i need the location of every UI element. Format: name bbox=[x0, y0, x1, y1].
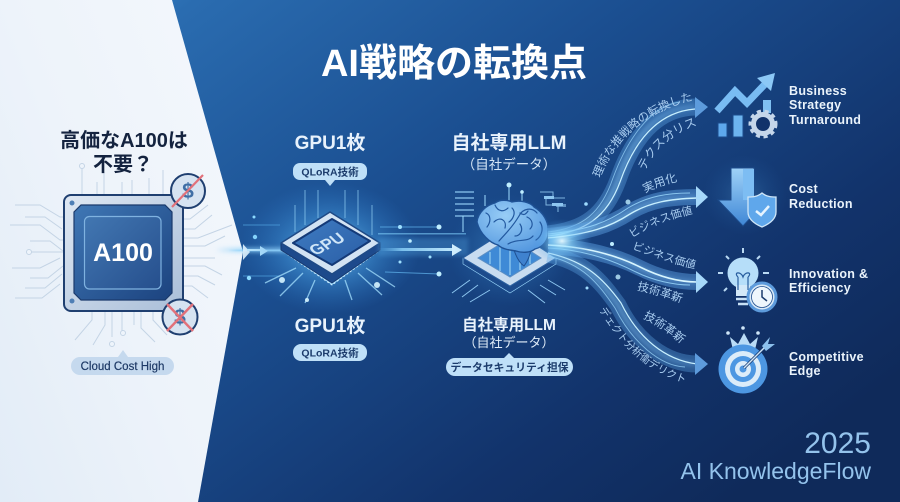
callout: Cloud Cost High: Cloud Cost High bbox=[81, 361, 164, 373]
icon: A100 chip: A100 bbox=[93, 239, 153, 267]
panel: outcome Innovation and Efficiency bbox=[718, 248, 868, 311]
arrow: data beams from GPU to LLM bbox=[378, 224, 468, 276]
arrow: flow to Innovation bbox=[548, 245, 708, 293]
icon: down arrow and shield bbox=[703, 155, 787, 235]
icon: light bulb and clock bbox=[718, 248, 776, 311]
text: Innovation & Efficiency: Innovation & bbox=[789, 267, 868, 281]
panel: outcome Competitive Edge bbox=[718, 326, 864, 394]
text: Business Strategy Turnaround: Strategy bbox=[789, 98, 841, 112]
arrow: data beams from A100 to GPU bbox=[215, 216, 300, 280]
panel: left light panel bbox=[0, 0, 243, 502]
text: curved flow labels: ビジネス価値 bbox=[634, 242, 696, 269]
callout: QLoRA技術 lower bbox=[293, 344, 367, 361]
callout: データセキュリティ担保 bbox=[446, 353, 573, 376]
text: curved flow labels: 技術革新 bbox=[638, 280, 684, 303]
callout: QLoRA技術 top bbox=[293, 163, 367, 186]
icon: crossed-out dollar coin bottom: $ bbox=[174, 306, 186, 329]
text: Business Strategy Turnaround: Business bbox=[789, 84, 847, 98]
title: AI戦略の転換点 bbox=[321, 43, 587, 85]
callout: QLoRA技術 lower: QLoRA技術 bbox=[301, 346, 359, 360]
text: curved flow labels: 技術革新 bbox=[643, 310, 686, 344]
text: curved flow labels: 実用化 bbox=[642, 173, 677, 194]
panel: GPU section bbox=[240, 132, 420, 361]
heading: GPU1枚: GPU1枚 bbox=[295, 132, 365, 154]
arrow: flow to Business Strategy bbox=[548, 97, 708, 236]
heading: 高価なA100は不要？ bbox=[60, 129, 188, 176]
text: 2025 AI KnowledgeFlow: AI KnowledgeFlow bbox=[680, 458, 871, 484]
text: curved flow labels: デェクト分析衞デリクト bbox=[600, 308, 684, 382]
text: Competitive Edge: Edge bbox=[789, 364, 821, 378]
panel: A100 chip section bbox=[10, 129, 232, 375]
callout: QLoRA技術 top: QLoRA技術 bbox=[301, 166, 359, 178]
text: curved flow labels: テクス分リス bbox=[638, 118, 696, 168]
callout: Cloud Cost High bbox=[71, 350, 174, 375]
text: curved flow labels bbox=[592, 93, 696, 382]
text: Cost Reduction: Reduction bbox=[789, 197, 853, 211]
text: Competitive Edge: Competitive bbox=[789, 350, 864, 364]
heading: 自社専用LLM lower: 自社専用LLM bbox=[462, 315, 556, 334]
circuit traces around A100 chip bbox=[10, 164, 232, 346]
text: Business Strategy Turnaround bbox=[789, 84, 861, 127]
text: Competitive Edge bbox=[789, 350, 864, 378]
arrow: flow to Competitive Edge bbox=[548, 253, 708, 375]
heading: 高価なA100は不要？: 高価なA100は bbox=[60, 129, 188, 152]
arrow: flow to Cost Reduction bbox=[548, 186, 708, 238]
icon: A100 chip bbox=[64, 195, 183, 311]
icon: growth chart and gear bbox=[717, 73, 776, 137]
text: Cost Reduction: Cost bbox=[789, 182, 819, 196]
text: Cost Reduction bbox=[789, 182, 853, 211]
panel: LLM section bbox=[446, 132, 573, 376]
text: 自社データ: （自社データ） bbox=[462, 156, 556, 172]
text: 自社データ lower: （自社データ） bbox=[463, 335, 555, 350]
text: Business Strategy Turnaround: Turnaround bbox=[789, 113, 861, 127]
icon: crossed-out dollar coin top bbox=[171, 174, 205, 208]
icon: crossed-out dollar coin top: $ bbox=[182, 180, 194, 203]
text: Innovation & Efficiency bbox=[789, 267, 868, 295]
text: curved flow labels: 理術な推戦略の転換した bbox=[592, 93, 692, 178]
icon: crossed-out dollar coin bottom bbox=[162, 300, 198, 334]
icon: crown and target bbox=[718, 326, 775, 394]
icon: GPU chip with glow bbox=[240, 182, 420, 314]
text: 2025 AI KnowledgeFlow: 2025 bbox=[804, 427, 871, 460]
icon: brain on chip bbox=[448, 182, 572, 306]
callout: データセキュリティ担保: データセキュリティ担保 bbox=[450, 360, 569, 374]
text: Innovation & Efficiency: Efficiency bbox=[789, 281, 851, 295]
panel: outcome Cost Reduction bbox=[703, 155, 853, 235]
arrow: branching flows to outcomes bbox=[532, 97, 708, 375]
text: curved flow labels: ビジネス価値 bbox=[629, 206, 692, 236]
icon: GPU chip with glow: GPU bbox=[305, 230, 349, 259]
heading: 高価なA100は不要？: 不要？ bbox=[93, 153, 153, 176]
panel: outcome Business Strategy Turnaround bbox=[717, 73, 861, 137]
text: 2025 AI KnowledgeFlow bbox=[680, 427, 871, 484]
heading: 自社専用LLM: 自社専用LLM bbox=[451, 132, 567, 154]
heading: GPU1枚 lower: GPU1枚 bbox=[295, 315, 365, 337]
